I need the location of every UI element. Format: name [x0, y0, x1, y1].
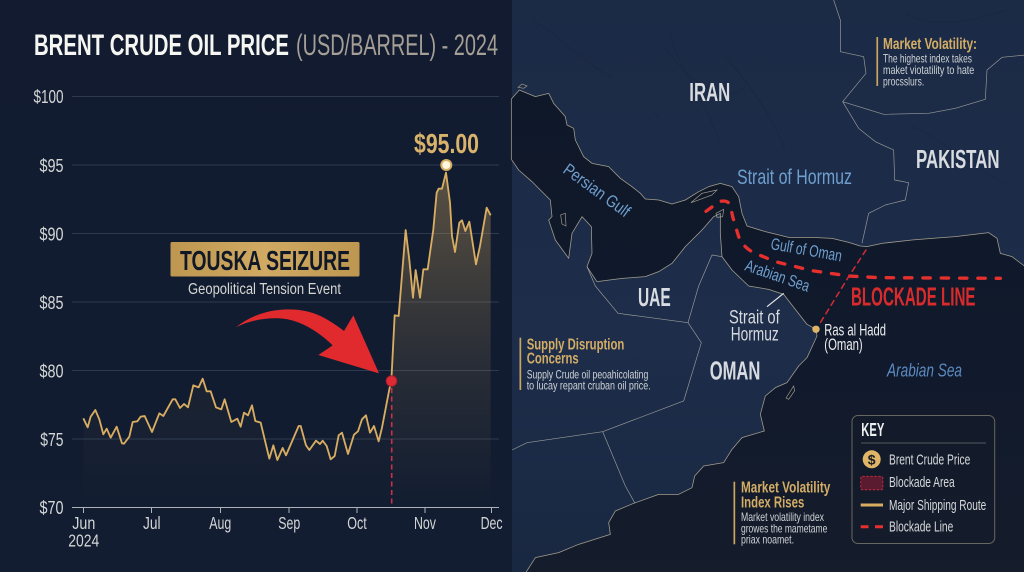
country labels: OMAN — [710, 355, 760, 385]
marker: Ras al Hadd: (Oman) — [824, 336, 863, 354]
country labels — [638, 77, 1000, 385]
x axis: Dec — [481, 513, 503, 533]
label: Strait of Hormuz with leader — [729, 293, 784, 345]
x axis: Oct — [347, 513, 367, 533]
x axis: 2024 — [68, 530, 100, 550]
callout: market volatility index rises: Market Volatility — [741, 480, 831, 497]
arrow: pointing to event — [236, 309, 379, 373]
peak value label: $95.00 — [414, 128, 479, 159]
event callout: Touska seizure — [170, 242, 360, 298]
water labels — [560, 160, 962, 381]
panel: price chart — [0, 0, 512, 572]
peak marker — [441, 160, 451, 170]
callout: supply disruption: Supply Crude oil peoahicolating — [527, 367, 648, 381]
key: Brent Crude Price — [863, 450, 970, 468]
key: Major Shipping Route — [861, 498, 986, 514]
callout: market volatility: Market Volatility: — [883, 36, 977, 53]
blockade line route — [706, 201, 1000, 323]
key: Blockade Line — [861, 519, 953, 535]
callout: supply disruption: Concerns — [527, 351, 579, 368]
sea: gulfs and Arabian Sea — [511, 90, 1024, 572]
legend: key: KEY — [861, 420, 884, 440]
event callout: Touska seizure: Geopolitical Tension Event — [188, 281, 342, 298]
marker: Ras al Hadd — [812, 321, 886, 354]
y axis labels: $80 — [40, 360, 64, 382]
key: Blockade Area: Blockade Area — [889, 475, 955, 491]
x axis: Nov — [414, 513, 436, 533]
callout: market volatility: procsslurs. — [883, 74, 924, 88]
country labels: IRAN — [689, 77, 730, 107]
y axis labels: $85 — [40, 292, 64, 313]
water labels: Gulf of Oman — [769, 235, 843, 265]
land borders — [512, 0, 1024, 503]
key: Blockade Line: Blockade Line — [889, 519, 953, 535]
y axis labels: $95 — [40, 155, 64, 176]
x axis — [68, 508, 503, 550]
callout: market volatility index rises: priax noamet. — [741, 533, 794, 547]
callout: market volatility index rises — [734, 480, 831, 547]
callout: supply disruption: Supply Disruption — [527, 336, 624, 353]
water labels: Strait of Hormuz — [737, 166, 852, 189]
y axis labels: $75 — [40, 429, 64, 450]
title: (USD/BARREL) - 2024 — [296, 29, 498, 62]
y axis labels: $90 — [40, 224, 64, 244]
x axis: Aug — [209, 513, 231, 533]
callout: market volatility: The highest index takes — [883, 51, 972, 65]
callout: market volatility index rises: Index Rises — [741, 495, 804, 512]
callout: market volatility — [876, 36, 977, 88]
x axis: Jul — [143, 513, 160, 533]
event callout: Touska seizure: TOUSKA SEIZURE — [180, 245, 350, 276]
water labels: Arabian Sea — [743, 257, 812, 296]
callout: market volatility index rises: growes the mametame — [741, 522, 828, 536]
price area fill and line — [83, 173, 491, 507]
label: Strait of Hormuz with leader: Hormuz — [731, 323, 779, 345]
water labels: Persian Gulf — [560, 160, 634, 221]
country labels: UAE — [638, 282, 671, 312]
key: Blockade Area — [861, 475, 955, 491]
event marker — [386, 376, 397, 386]
key: Brent Crude Price: Brent Crude Price — [889, 452, 970, 468]
callout: supply disruption — [520, 336, 651, 393]
y axis labels: $100 — [34, 86, 64, 107]
callout: market volatility: maket viotatility to hate — [883, 63, 975, 77]
callout: market volatility index rises: Market volatility index — [741, 510, 824, 524]
x axis: Sep — [278, 513, 300, 533]
water labels: Arabian Sea — [886, 360, 962, 381]
map geography — [511, 0, 1024, 572]
key: Brent Crude Price: $ — [868, 451, 876, 467]
x axis: Jun — [72, 513, 95, 533]
islands — [518, 84, 795, 399]
marker: Ras al Hadd: Ras al Hadd — [824, 321, 886, 339]
panel: map — [511, 0, 1024, 572]
event drop line — [391, 388, 393, 507]
y axis labels: $70 — [40, 497, 64, 518]
legend: key — [852, 416, 995, 544]
label: Strait of Hormuz with leader: Strait of — [729, 306, 780, 328]
y axis labels — [34, 86, 64, 518]
title: BRENT CRUDE OIL PRICE — [34, 29, 289, 62]
callout: supply disruption: to lucay repant cruban oil price. — [527, 379, 651, 393]
